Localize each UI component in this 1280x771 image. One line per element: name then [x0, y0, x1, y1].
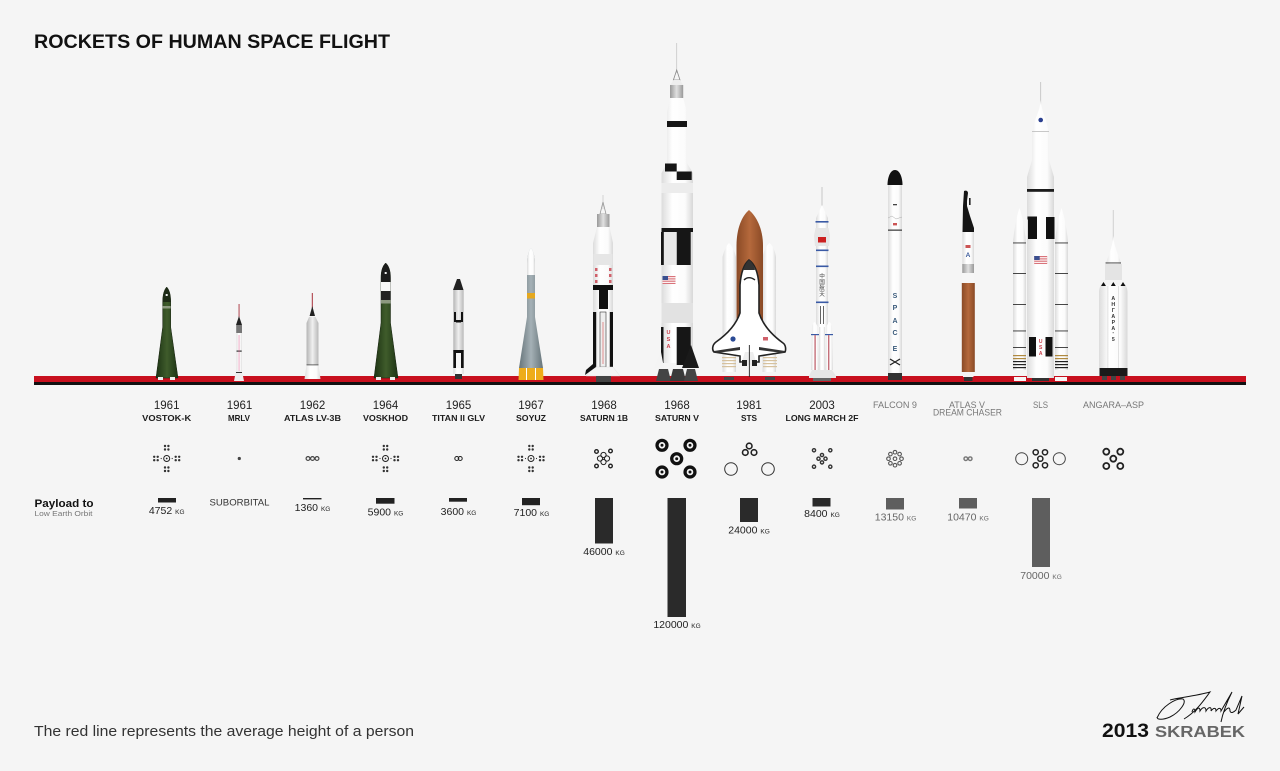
payload: Saturn 1B 46000 kg: 46000 KG: [583, 546, 625, 558]
payload: Atlas V 10470 kg: 10470 KG: [947, 512, 989, 524]
rocket: Angara A5P: Н: [1111, 302, 1115, 308]
rocket: Saturn V: U: [667, 330, 671, 336]
label: Atlas V Dream Chaser: [933, 400, 1002, 418]
payload: Saturn V 120000 kg: [653, 498, 701, 631]
label: MRLV: [227, 400, 252, 423]
rocket: SLS: A: [1039, 351, 1043, 357]
average person height line: [34, 376, 1246, 385]
payload: MRLV suborbital: SUBORBITAL: [210, 498, 270, 508]
rocket: Soyuz: [518, 248, 544, 380]
engines: Soyuz: [517, 445, 545, 472]
rocket: Falcon 9: E: [893, 346, 898, 353]
engines: Saturn V: [655, 439, 697, 479]
rocket: Saturn 1B: [585, 195, 620, 382]
payload: SLS 70000 kg: 70000 KG: [1020, 570, 1062, 582]
rocket: Titan II GLV: [453, 279, 464, 379]
label: Vostok-K: VOSTOK-K: [142, 413, 192, 423]
rocket: Angara A5P: А: [1111, 326, 1115, 332]
rocket: Falcon 9: A: [892, 318, 898, 325]
label: Voskhod: [363, 400, 408, 423]
rocket: Atlas V with Dream Chaser: A: [966, 252, 971, 259]
engines: Atlas V: [964, 457, 972, 461]
engines: Long March 2F: [812, 449, 832, 468]
rocket: SLS: [1013, 82, 1068, 381]
label: Voskhod: 1964: [373, 400, 399, 412]
payload: Atlas V 10470 kg: [947, 498, 989, 524]
label: Vostok-K: 1961: [154, 400, 179, 412]
payload heading: [34, 498, 94, 518]
rocket: Saturn V: S: [667, 337, 671, 343]
rocket: Saturn V: A: [667, 344, 671, 350]
label: MRLV: 1961: [227, 400, 252, 412]
rocket: Long March 2F: [809, 187, 836, 381]
payload: Saturn 1B 46000 kg: [583, 498, 625, 558]
payload: Long March 2F 8400 kg: [804, 498, 840, 520]
label: Titan II GLV: 1965: [446, 400, 471, 412]
rocket: Angara A5P: [1099, 210, 1128, 380]
engines: Falcon 9: [887, 450, 903, 467]
label: SLS: SLS: [1033, 400, 1048, 411]
label: Atlas V Dream Chaser: ATLAS V: [949, 400, 986, 411]
rocket: Long March 2F: 航: [819, 284, 825, 292]
rocket: Angara A5P: Р: [1112, 320, 1116, 326]
label: Atlas LV-3B: ATLAS LV-3B: [284, 413, 341, 423]
payload: Falcon 9 13150 kg: 13150 KG: [875, 512, 916, 524]
rocket: Falcon 9: P: [893, 305, 898, 312]
payload: Vostok-K 4752 kg: 4752 KG: [149, 505, 185, 517]
credit: name: SKRABEK: [1155, 724, 1245, 741]
label: STS: [736, 400, 762, 423]
engines: SLS: [1016, 450, 1065, 468]
payload heading: Low Earth Orbit: [34, 509, 94, 518]
payload: Soyuz 7100 kg: 7100 KG: [514, 507, 549, 519]
label: Angara-ASP: ANGARA–ASP: [1083, 400, 1144, 411]
engines: Saturn 1B: [595, 449, 612, 468]
engines: Atlas LV-3B: [306, 457, 319, 460]
label: Saturn 1B: 1968: [591, 400, 617, 412]
rocket: Falcon 9: [888, 170, 902, 380]
rocket: Atlas LV-3B: [304, 293, 320, 379]
rocket: SLS: S: [1039, 345, 1043, 351]
rocket: Voskhod: [374, 263, 398, 380]
label: Titan II GLV: [432, 400, 485, 423]
label: Atlas LV-3B: [284, 400, 341, 423]
rocket: Long March 2F: 天: [819, 291, 825, 298]
payload: Falcon 9 13150 kg: [875, 498, 916, 524]
label: Saturn V: [655, 400, 699, 423]
engines: Angara: [1103, 449, 1123, 469]
label: Soyuz: 1967: [518, 400, 544, 412]
rocket: Vostok-K: [156, 287, 178, 380]
rocket: MRLV: [234, 304, 244, 381]
label: Falcon 9: FALCON 9: [873, 400, 917, 411]
payload: Atlas LV-3B 1360 kg: 1360 KG: [295, 502, 330, 514]
rocket: SLS: U: [1039, 339, 1043, 345]
label: Soyuz: [516, 400, 546, 423]
rocket: Angara A5P: -: [1112, 330, 1114, 336]
signature: [1157, 692, 1244, 722]
engines: Vostok-K: [153, 445, 180, 472]
rocket: Angara A5P: 5: [1112, 337, 1115, 343]
label: Saturn V: 1968: [664, 400, 690, 412]
rocket: Atlas V with Dream Chaser: [962, 191, 975, 381]
rocket: Long March 2F: 国: [819, 279, 825, 286]
payload: Vostok-K 4752 kg: [149, 498, 185, 517]
payload: Titan II GLV 3600 kg: [441, 498, 476, 518]
engines: Titan II GLV: [455, 456, 462, 460]
payload: Soyuz 7100 kg: [514, 498, 549, 519]
label: Saturn 1B: SATURN 1B: [580, 413, 628, 423]
label: Titan II GLV: TITAN II GLV: [432, 413, 485, 423]
payload: STS 24000 kg: [728, 498, 770, 536]
label: MRLV: MRLV: [228, 413, 250, 423]
footnote: The red line represents the average height of a person: [34, 724, 414, 740]
rocket: Falcon 9: C: [892, 330, 898, 337]
label: Vostok-K: [142, 400, 192, 423]
label: Saturn 1B: [580, 400, 628, 423]
rocket: Falcon 9: S: [893, 293, 898, 300]
payload: Voskhod 5900 kg: 5900 KG: [368, 506, 403, 518]
label: Long March 2F: 2003: [809, 400, 835, 412]
payload: STS 24000 kg: 24000 KG: [728, 524, 770, 536]
title: ROCKETS OF HUMAN SPACE FLIGHT: [34, 32, 390, 53]
label: Soyuz: SOYUZ: [516, 413, 546, 423]
payload: SLS 70000 kg: [1020, 498, 1062, 582]
label: STS: STS: [741, 413, 757, 423]
label: STS: 1981: [736, 400, 762, 412]
rocket: Angara A5P: Г: [1112, 308, 1115, 314]
payload: Voskhod 5900 kg: [368, 498, 403, 518]
label: Atlas LV-3B: 1962: [300, 400, 325, 412]
credit: year: 2013: [1102, 721, 1149, 742]
payload: Titan II GLV 3600 kg: 3600 KG: [441, 506, 476, 518]
rocket: STS Space Shuttle: [713, 210, 786, 380]
engines: Voskhod: [372, 445, 399, 472]
label: Long March 2F: [786, 400, 858, 423]
payload: Long March 2F 8400 kg: 8400 KG: [804, 508, 840, 520]
rocket: Angara A5P: А: [1111, 296, 1115, 302]
payload: Saturn V 120000 kg: 120000 KG: [653, 619, 701, 631]
label: Long March 2F: LONG MARCH 2F: [786, 413, 858, 423]
payload heading: Payload to: [34, 498, 94, 510]
rocket: Saturn V: [654, 43, 699, 381]
label: Voskhod: VOSKHOD: [363, 413, 408, 423]
rocket: Long March 2F: 中: [819, 272, 825, 280]
label: Saturn V: SATURN V: [655, 413, 699, 423]
label: Atlas V Dream Chaser: DREAM CHASER: [933, 408, 1002, 418]
engines: STS: [725, 443, 774, 475]
engines: MRLV: [238, 457, 241, 460]
rocket: Angara A5P: А: [1111, 314, 1115, 320]
